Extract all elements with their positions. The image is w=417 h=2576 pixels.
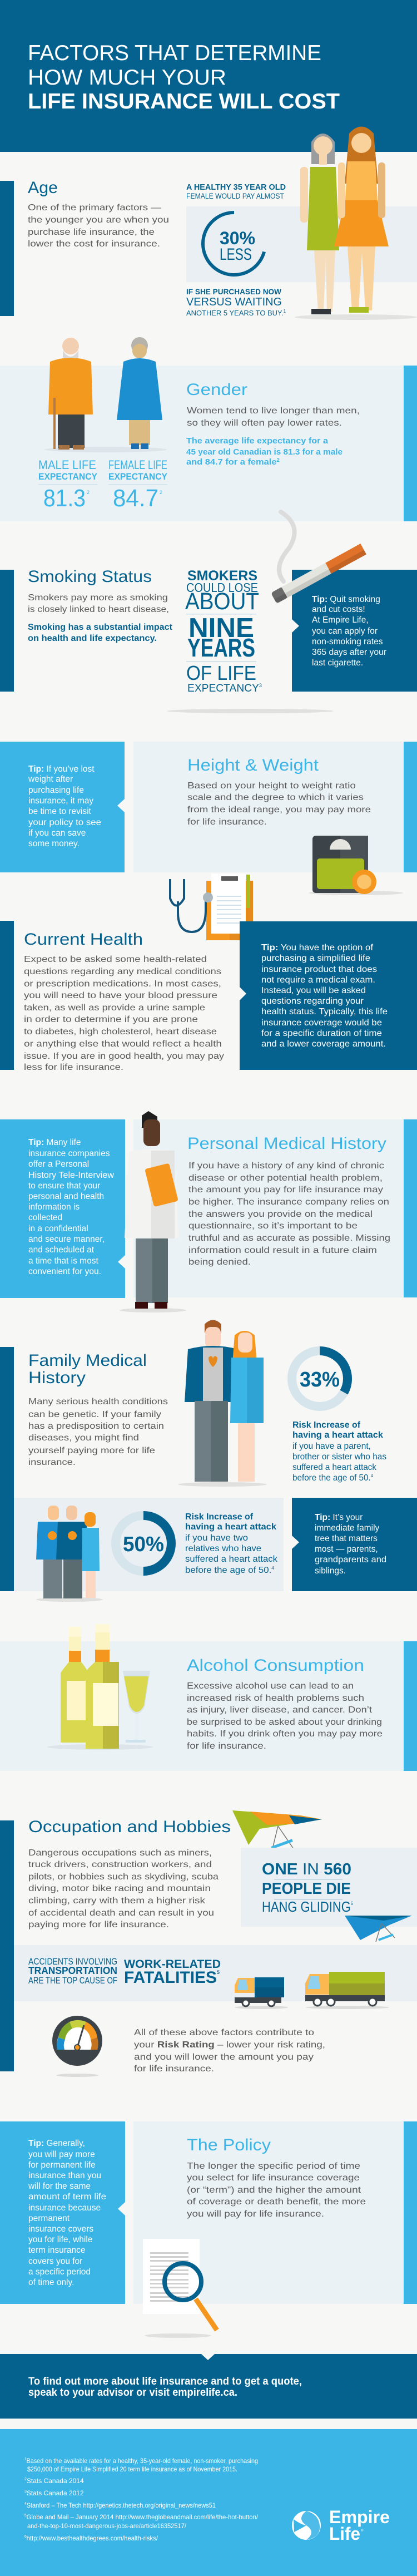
stat: hang gliding: HANG GLIDING [262, 1898, 367, 1915]
text block: occupation: diving, motor bike racing and mountain [28, 1884, 211, 1893]
tip: tele-interview: in a confidential [28, 1224, 88, 1233]
stat: 30% less: A HEALTHY 35 YEAR OLD [186, 182, 286, 192]
stat: male life expectancy: 81.3 [43, 485, 86, 512]
tip: tele-interview: convenient for you. [28, 1267, 101, 1276]
text block: alcohol: for life insurance. [187, 1741, 266, 1751]
footnotes: 5 [24, 2514, 27, 2518]
stat: nine years [185, 568, 262, 694]
text block: 33% risk: 4 [371, 1473, 374, 1478]
text block: alcohol: Excessive alcohol use can lead to an [187, 1681, 354, 1691]
logo: Empire Life: Empire [329, 2507, 390, 2527]
stat: nine years: EXPECTANCY [187, 683, 258, 694]
tip: tele-interview: History Tele-Interview [28, 1171, 115, 1180]
header banner [0, 0, 417, 152]
icon: document with magnifier [143, 2239, 217, 2338]
text block: current health: taken, as well as provide a urine sample [24, 1003, 205, 1013]
text block: 33% risk [292, 1420, 386, 1483]
tip: immediate family: grandparents and [315, 1555, 386, 1565]
logo: Empire Life: ® [361, 2529, 364, 2533]
text block: occupation: truck drivers, construction workers, and [28, 1860, 212, 1869]
text block: current health: in order to determine if you are prone [24, 1015, 198, 1024]
stat: nine years: COULD LOSE [186, 580, 258, 595]
text block: gender: Women tend to live longer than men, [187, 406, 360, 416]
chart: 33% donut [292, 1351, 348, 1407]
tip: simplified insurance: not require a medical exam. [261, 975, 375, 985]
text block: current health: or prescription medications. In most cases, [24, 979, 221, 989]
panel: age [0, 127, 417, 320]
text block: current health: you will need to have your blood pressure [24, 991, 217, 1000]
text block: personal medical history: the amount you pay for life insurance may [188, 1185, 383, 1195]
text block: risk rating [134, 2028, 325, 2074]
heading: current health: Current Health [24, 930, 143, 949]
text block: alcohol: as injury, liver disease, and cancer. Don’t [187, 1705, 373, 1715]
icon: hang glider top [232, 1810, 322, 1850]
illustration: doctor [120, 1111, 186, 1312]
text block: smoking: Smoking has a substantial impact [28, 623, 173, 632]
icon: stethoscope and clipboard [170, 874, 253, 940]
stat: female life expectancy: EXPECTANCY [108, 471, 168, 482]
tip: simplified insurance [261, 943, 388, 1049]
heading: family medical history: Family Medical [28, 1351, 147, 1370]
icon: trucks [235, 1972, 389, 2009]
text block: current health: less for life insurance. [24, 1063, 123, 1072]
text block: smoking: Smokers pay more as smoking [28, 593, 168, 603]
stat: 30% less: 30% [220, 228, 255, 248]
chart: 33% donut: 33% [300, 1368, 340, 1391]
stat: transportation fatalities [14, 1945, 417, 2001]
footnotes: 6 [24, 2535, 27, 2539]
tip: quit smoking [312, 595, 386, 668]
tip: permanent vs term: insurance covers [28, 2224, 93, 2234]
stat: 30% less [186, 182, 417, 317]
stat: hang gliding: ONE IN 560 [262, 1861, 351, 1878]
heading: personal medical history: Personal Medical History [187, 1134, 386, 1153]
text block: 33% risk: brother or sister who has [292, 1452, 386, 1462]
stat: male life expectancy: EXPECTANCY [38, 471, 98, 482]
tip: permanent vs term: permanent [28, 2214, 70, 2223]
tip: tele-interview: and scheduled at [28, 1245, 95, 1255]
tip: simplified insurance: purchasing a simplified life [261, 954, 370, 963]
panel: occupation and hobbies [0, 1810, 417, 2077]
icon: scale and measuring tape [309, 836, 403, 895]
text block: occupation: pilots, or hobbies such as skydiving, scuba [28, 1872, 219, 1882]
tip: permanent vs term: insurance than you [28, 2171, 101, 2180]
tip: lost weight: Tip: If you’ve lost [28, 764, 95, 774]
text block: 33% risk: having a heart attack [292, 1430, 383, 1440]
text block: alcohol [187, 1681, 383, 1751]
text block: personal medical history: be higher. The insurance company relies on [188, 1197, 389, 1207]
tip: tele-interview: Tip: Many life [28, 1138, 81, 1147]
call to action banner: To find out more about life insurance and to get a quote, [28, 2376, 302, 2387]
text block: personal medical history: If you have a history of any kind of chronic [188, 1161, 384, 1171]
text block: risk rating: and you will lower the amount you pay [134, 2052, 314, 2062]
text block: current health: Expect to be asked some health-related [24, 955, 207, 964]
text block: 50% risk: if you have two [185, 1533, 248, 1543]
stat: male life expectancy: MALE LIFE [38, 458, 96, 472]
text block: personal medical history: the answers you provide on the medical [188, 1210, 373, 1219]
sub-panel: 50% risk [14, 1498, 284, 1602]
text block: height and weight: scale and the degree to which it varies [187, 793, 364, 802]
stat: nine years: OF LIFE [186, 662, 256, 684]
text block: 50% risk: suffered a heart attack [185, 1555, 278, 1564]
text block: height and weight [187, 781, 371, 827]
panel: gender [0, 337, 417, 521]
tip: permanent vs term: of time only. [28, 2278, 74, 2287]
footnotes: http://www.besthealthdegrees.com/health-risks/ [27, 2534, 158, 2542]
tip: permanent vs term: amount of term life [28, 2192, 106, 2202]
footnotes: Based on the available rates for a healthy, 35-year-old female, non-smoker, purchasing [27, 2457, 258, 2465]
tip: quit smoking: you can apply for [312, 626, 378, 636]
icon: speedometer [52, 2016, 102, 2077]
text block: personal medical history: information could result in a future claim [188, 1246, 377, 1255]
tip: permanent vs term: term insurance [28, 2246, 86, 2255]
tip: quit smoking: non-smoking rates [312, 637, 383, 647]
tip: immediate family: most — parents, [315, 1544, 378, 1554]
tip: lost weight [28, 764, 101, 848]
footnotes: 4 [24, 2502, 27, 2506]
tip: lost weight: weight after [28, 774, 73, 784]
stat: transportation fatalities: FATALITIES [124, 1968, 217, 1987]
heading: smoking status: Smoking Status [28, 567, 152, 586]
stat: transportation fatalities: ARE THE TOP CAUSE OF [28, 1975, 117, 1986]
logo: Empire Life: Life [329, 2524, 360, 2544]
tip: simplified insurance: for a specific duration of time [261, 1029, 382, 1038]
footnotes: 3 [24, 2490, 27, 2494]
text block: risk rating: your Risk Rating – lower your risk rating, [134, 2040, 325, 2050]
call to action banner: speak to your advisor or visit empirelife.ca. [28, 2387, 237, 2399]
text block: smoking: on health and life expectancy. [28, 634, 157, 643]
tip: quit smoking: and cut costs! [312, 605, 365, 614]
text block: smoking [28, 593, 173, 643]
text block: height and weight: for life insurance. [187, 817, 267, 827]
stat: male life expectancy [38, 458, 98, 512]
text block: the policy: you will pay for life insurance. [187, 2209, 324, 2219]
stat: female life expectancy: 2 [160, 490, 162, 495]
icon: cigarette [271, 544, 366, 604]
tip: quit smoking: At Empire Life, [312, 615, 369, 625]
panel: current health [0, 921, 417, 1072]
tip: immediate family: siblings. [315, 1566, 346, 1576]
text block: family medical history: diseases, you might find [28, 1433, 139, 1443]
footnotes: Globe and Mail – January 2014 http://www.theglobeandmail.com/life/the-hot-button/ [27, 2513, 259, 2521]
stat: female life expectancy [108, 458, 168, 512]
text block: family medical history: Many serious health conditions [28, 1397, 168, 1407]
footnotes: Stats Canada 2012 [27, 2489, 84, 2497]
text block: the policy: (or “term”) and the higher the amount [187, 2185, 361, 2195]
text block: age: purchase life insurance, the [28, 228, 155, 237]
tip: tele-interview: collected [28, 1213, 62, 1222]
illustration: wine bottles and glass [47, 1624, 153, 1750]
tip: tele-interview: information is [28, 1202, 80, 1212]
stat: nine years: NINE [188, 613, 254, 643]
heading: gender: Gender [186, 381, 247, 399]
text block: the policy: The longer the specific period of time [187, 2162, 360, 2171]
stat: nine years: 3 [259, 683, 262, 688]
stat: 30% less: VERSUS WAITING [186, 296, 282, 308]
stat: 30% less: IF SHE PURCHASED NOW [186, 287, 282, 296]
stat: hang gliding: 6 [351, 1901, 353, 1906]
text block: personal medical history: questionnaire, so it’s important to be [188, 1221, 358, 1231]
tip: quit smoking: last cigarette. [312, 658, 363, 668]
heading: age: Age [28, 179, 58, 197]
footnotes: Stats Canada 2014 [27, 2477, 84, 2485]
title: FACTORS THAT DETERMINE [28, 41, 321, 65]
text block: the policy [187, 2162, 366, 2219]
footnotes: Stanford – The Tech http://genetics.thetech.org/original_news/news51 [27, 2501, 216, 2509]
heading: height and weight: Height & Weight [187, 756, 319, 774]
tip: permanent vs term: for permanent life [28, 2160, 96, 2170]
heading: family medical history [28, 1351, 147, 1387]
text block: risk rating: for life insurance. [134, 2064, 214, 2074]
text block: the policy: of coverage or death benefit, the more [187, 2197, 366, 2207]
tip: tele-interview: offer a Personal [28, 1159, 89, 1169]
call to action banner [0, 2354, 417, 2419]
text block: alcohol: increased risk of health problems such [187, 1694, 364, 1703]
tip: permanent vs term: a specific period [28, 2267, 91, 2277]
text block: gender: and 84.7 for a female [186, 457, 269, 467]
text block: current health: questions regarding any medical conditions [24, 967, 221, 976]
text block: occupation: Dangerous occupations such as miners, [28, 1848, 212, 1858]
panel: the policy [0, 2121, 417, 2338]
text block: 50% risk: having a heart attack [185, 1522, 276, 1532]
text block: age: lower the cost for insurance. [28, 239, 160, 249]
illustration: three relatives [36, 1506, 103, 1602]
text block: age: One of the primary factors — [28, 203, 161, 213]
text block: 50% risk [185, 1512, 278, 1575]
text block: personal medical history [188, 1161, 390, 1267]
text block: 50% risk: before the age of 50. [185, 1566, 267, 1575]
panel: smoking status [0, 512, 417, 713]
tip: tele-interview: a time that is most [28, 1256, 98, 1266]
stat: transportation fatalities: ACCIDENTS INVOLVING [28, 1956, 117, 1967]
icon: hang glider bottom [345, 1916, 412, 1942]
logo: Empire Life [292, 2507, 390, 2544]
tip: lost weight: if you can save [28, 828, 86, 838]
tip: simplified insurance: and a lower coverage amount. [261, 1039, 386, 1049]
tip: lost weight: insurance, it may [28, 796, 93, 806]
stat: 30% less: LESS [220, 245, 252, 264]
heading: alcohol consumption: Alcohol Consumption [187, 1656, 364, 1675]
text block: height and weight: Based on your height to weight ratio [187, 781, 356, 791]
heading: family medical history: History [28, 1369, 86, 1387]
text block: 33% risk: Risk Increase of [292, 1420, 361, 1430]
text block: occupation: of accidental death and can result in you [28, 1908, 214, 1918]
footer [0, 2429, 417, 2576]
text block: age: the younger you are when you [28, 215, 169, 225]
text block: 33% risk: suffered a heart attack [292, 1463, 377, 1472]
tip: tele-interview: and secure manner, [28, 1235, 105, 1244]
stat: transportation fatalities: 5 [217, 1970, 220, 1975]
footnotes: 1 [24, 2457, 27, 2461]
text block: 50% risk: 4 [271, 1566, 275, 1571]
text block: 33% risk: before the age of 50. [292, 1473, 375, 1483]
heading: occupation and hobbies: Occupation and Hobbies [28, 1818, 231, 1836]
tip: immediate family [292, 1498, 417, 1591]
text block: 50% risk: Risk Increase of [185, 1512, 254, 1522]
text block: risk rating: All of these above factors contribute to [134, 2028, 314, 2037]
tip: simplified insurance: Tip: You have the option of [261, 943, 374, 953]
text block: height and weight: from the ideal range, you may pay more [187, 805, 371, 815]
panel: height and weight [0, 742, 417, 940]
icon: smoke [279, 512, 295, 581]
text block: family medical history: can be genetic. If your family [28, 1410, 161, 1419]
text block: gender [186, 406, 360, 467]
tip: tele-interview: insurance companies [28, 1149, 110, 1158]
tip: quit smoking: 365 days after your [312, 648, 386, 657]
text block: family medical history: insurance. [28, 1458, 76, 1467]
tip: immediate family: immediate family [315, 1523, 380, 1533]
title: LIFE INSURANCE WILL COST [28, 90, 340, 113]
text block: current health: to diabetes, high cholesterol, heart disease [24, 1027, 217, 1037]
tip: permanent vs term: Tip: Generally, [28, 2139, 85, 2148]
tip: tele-interview: to ensure that your [28, 1181, 100, 1191]
chart: 50% donut: 50% [123, 1533, 164, 1556]
footnotes [24, 2457, 259, 2542]
stat: 30% less: FEMALE WOULD PAY ALMOST [186, 191, 284, 200]
tip: simplified insurance: questions regarding your [261, 996, 364, 1006]
text block: 50% risk: relatives who have [185, 1544, 261, 1553]
tip: immediate family: Tip: It’s your [315, 1513, 363, 1522]
text block: family medical history [28, 1397, 168, 1467]
stat: female life expectancy: FEMALE LIFE [108, 458, 167, 472]
text block: occupation [28, 1848, 219, 1929]
text block: family medical history: has a predisposition to certain [28, 1422, 164, 1431]
text block: current health: or anything else that would reflect a health [24, 1039, 222, 1049]
stat: hang gliding: PEOPLE DIE [262, 1880, 351, 1898]
stat: transportation fatalities: TRANSPORTATION [28, 1965, 117, 1976]
tip: permanent vs term: insurance because [28, 2203, 101, 2213]
tip: simplified insurance: insurance coverage would be [261, 1018, 382, 1028]
footnotes: $250,000 of Empire Life Simplified 20 term life insurance as of November 2015. [27, 2465, 237, 2473]
footnotes: 2 [24, 2478, 27, 2481]
stat: 30% less: ANOTHER 5 YEARS TO BUY. [186, 309, 284, 317]
tip: simplified insurance: insurance product that does [261, 965, 377, 974]
stat: male life expectancy: 2 [87, 490, 90, 495]
text block: gender: so they will often pay lower rates. [187, 418, 342, 428]
text block: family medical history: yourself paying more for life [28, 1446, 155, 1455]
footnotes: and-the-top-10-most-dangerous-jobs-are/article16352517/ [27, 2522, 187, 2530]
tip: permanent vs term: you for life, while [28, 2235, 92, 2244]
heading: the policy: The Policy [187, 2136, 271, 2154]
text block: smoking: is closely linked to heart disease, [28, 605, 169, 614]
text block: current health [24, 955, 224, 1072]
text block: current health: issue. If you are in good health, you may pay [24, 1052, 224, 1061]
text block: gender: The average life expectancy for a [186, 436, 329, 446]
title [28, 41, 340, 113]
stat: transportation fatalities: WORK-RELATED [124, 1958, 221, 1971]
tip: simplified insurance: health status. Typically, this life [261, 1007, 388, 1016]
text block: age [28, 203, 169, 249]
text block: 33% risk: if you have a parent, [292, 1442, 371, 1451]
stat: hang gliding [241, 1848, 417, 1927]
tip: lost weight: your policy to see [28, 818, 101, 827]
text block: personal medical history: disease or other potential health problem, [188, 1173, 383, 1183]
stat: nine years: ABOUT [185, 588, 259, 615]
tip: immediate family: tree that matters [315, 1534, 378, 1543]
text block: alcohol: habits. If you drink often you may pay more [187, 1729, 383, 1739]
tip: permanent vs term: will for the same [28, 2182, 91, 2191]
text block: occupation: paying more for life insurance. [28, 1920, 169, 1929]
stat: 30% less: 1 [284, 309, 286, 314]
tip: permanent vs term: covers you for [28, 2257, 82, 2266]
tip: tele-interview [28, 1138, 115, 1276]
panel: alcohol consumption [0, 1624, 417, 1771]
text block: gender: 45 year old Canadian is 81.3 for a male [186, 447, 342, 457]
illustration: couple [178, 1320, 267, 1487]
panel: family medical history [0, 1320, 417, 1602]
tip: quit smoking: Tip: Quit smoking [312, 595, 380, 604]
tip: permanent vs term [28, 2139, 106, 2287]
illustration: elderly couple [44, 337, 167, 452]
tip: lost weight: some money. [28, 839, 80, 848]
tip: permanent vs term: you will pay more [28, 2150, 95, 2159]
panel: personal medical history [0, 1111, 417, 1312]
tip: simplified insurance: Instead, you will be asked [261, 986, 366, 995]
illustration: two women [295, 127, 417, 320]
stat: nine years: SMOKERS [187, 568, 257, 584]
stat: nine years: YEARS [187, 633, 255, 662]
text block: gender: 2 [277, 457, 280, 463]
text block: personal medical history: truthful and as accurate as possible. Missing [188, 1233, 390, 1243]
tip: tele-interview: personal and health [28, 1192, 104, 1201]
text block: personal medical history: being denied. [188, 1257, 251, 1267]
text block: the policy: you select for life insurance coverage [187, 2173, 360, 2183]
tip: lost weight: purchasing life [28, 786, 84, 795]
chart: 50% donut [116, 1516, 171, 1571]
tip: lost weight: be time to revisit [28, 807, 92, 816]
stat: female life expectancy: 84.7 [113, 485, 158, 512]
title: HOW MUCH YOUR [28, 66, 226, 90]
text block: alcohol: be surprised to be asked about your drinking [187, 1718, 382, 1727]
text block: occupation: climbing, carry with them a higher risk [28, 1896, 206, 1906]
